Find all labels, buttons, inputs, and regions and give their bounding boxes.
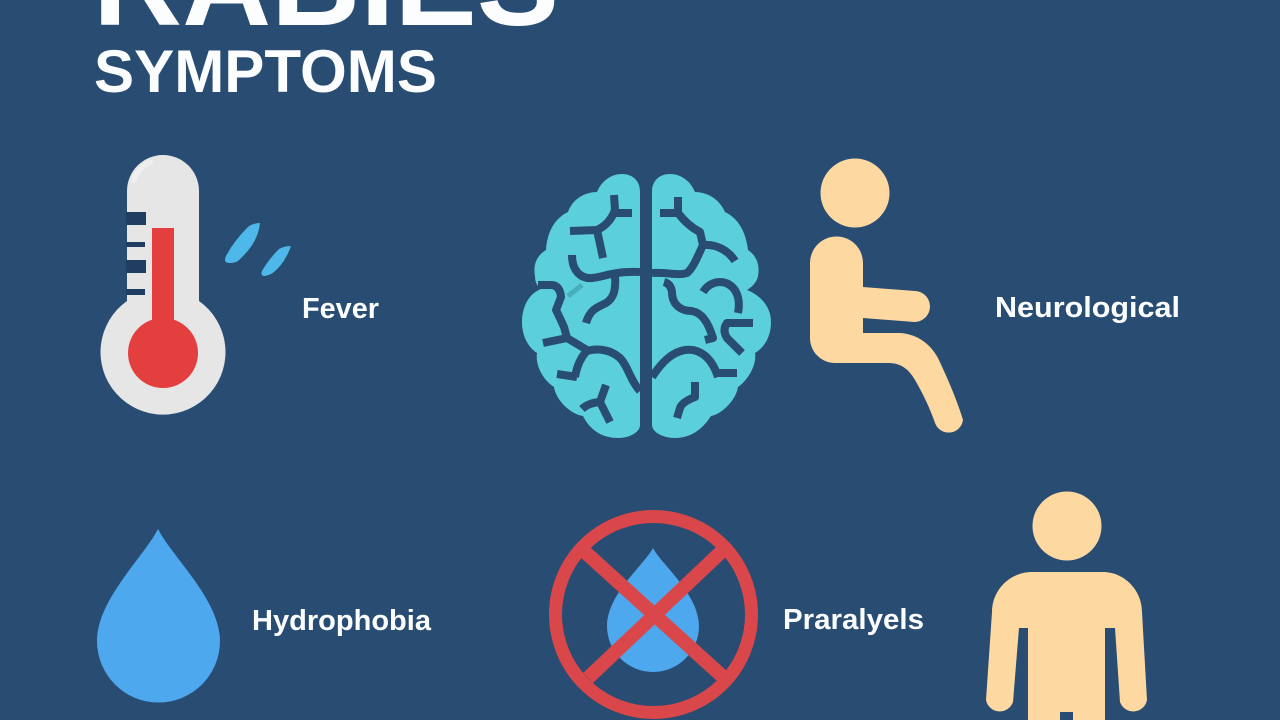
icon: brain (522, 174, 771, 438)
label: neurological: Neurological (995, 292, 1180, 324)
subtitle: SYMPTOMS (94, 38, 437, 105)
icon: water drop (97, 529, 220, 702)
label: hydrophobia: Hydrophobia (252, 605, 432, 637)
icon: cold droplets (225, 223, 291, 276)
label: paralysis: Praralyels (783, 604, 924, 636)
icon: thermometer (101, 155, 226, 415)
icon: crossed-out water drop (556, 516, 752, 712)
icon: seated person (810, 158, 963, 433)
brain folds (538, 195, 753, 422)
brain shading mark (568, 285, 582, 296)
right hemisphere (652, 174, 771, 438)
label: fever: Fever (302, 293, 379, 325)
left hemisphere (522, 174, 640, 438)
icon: standing person (986, 492, 1147, 720)
